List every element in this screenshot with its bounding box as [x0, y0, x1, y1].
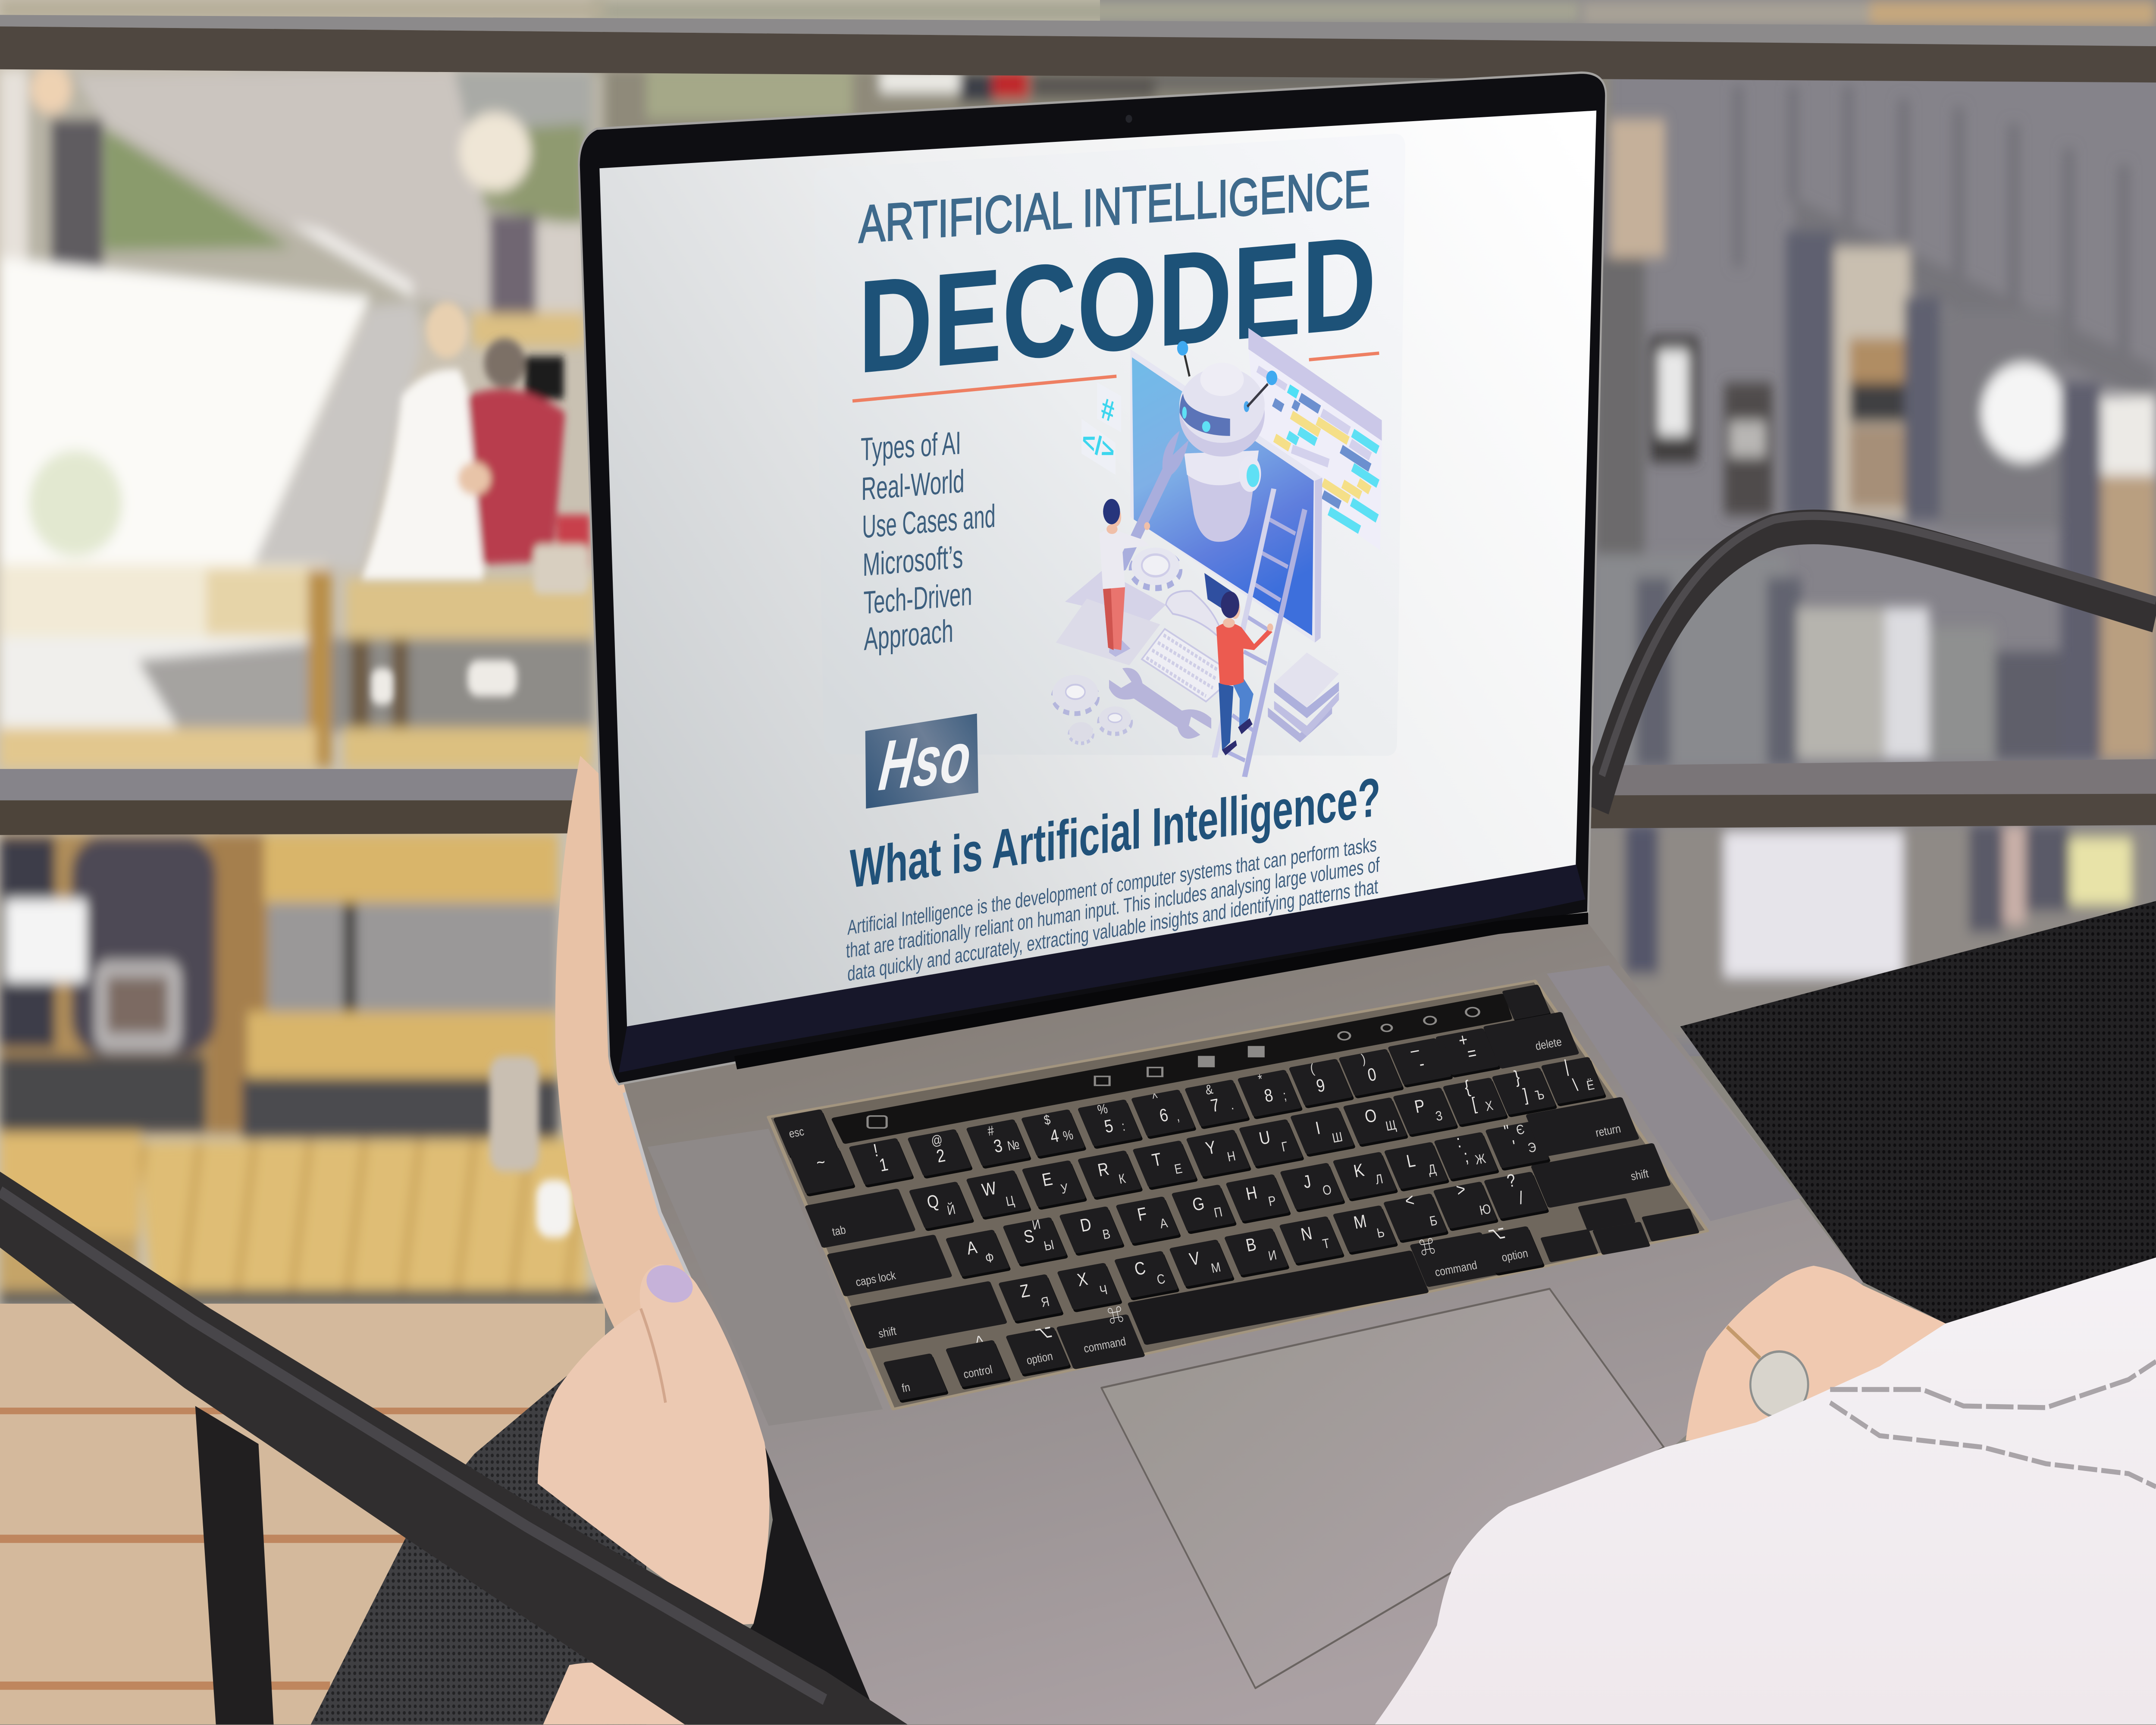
title DECODED: DECODED [858, 207, 1376, 401]
key labels: " [1502, 1121, 1512, 1142]
key labels: 7 [1209, 1095, 1221, 1116]
key labels: O [1363, 1105, 1379, 1127]
orange rule left [852, 376, 1116, 401]
keys [777, 986, 1697, 1401]
white shirt [1375, 1258, 2156, 1725]
key labels: % [1096, 1101, 1109, 1118]
key labels: Ц [1005, 1193, 1016, 1209]
key labels: А [1159, 1216, 1169, 1232]
code panel [1248, 328, 1382, 550]
key labels: ^ [975, 1332, 985, 1353]
paragraph: data quickly and accurately, extracting valuable insights and identifying patterns that [847, 875, 1378, 986]
person in white [1100, 499, 1150, 657]
lower bezel tint [619, 863, 1586, 1073]
key labels: { [1463, 1077, 1472, 1098]
key labels: shift [1630, 1167, 1650, 1183]
handrail top [0, 15, 2156, 82]
key labels: Ф [984, 1250, 995, 1266]
key labels: } [1513, 1067, 1522, 1088]
key labels: Я [1040, 1294, 1051, 1310]
heading: what is AI: What is Artificial Intelligence? [850, 766, 1381, 900]
key labels: , [1175, 1109, 1181, 1124]
key labels: K [1352, 1160, 1366, 1182]
key labels: О [1321, 1182, 1333, 1198]
key labels: command [1434, 1258, 1478, 1279]
fingernail [644, 1260, 696, 1308]
key labels: И [1031, 1217, 1042, 1233]
key labels: option [1501, 1247, 1529, 1264]
gears [1053, 675, 1131, 743]
key labels: Е [1173, 1161, 1184, 1177]
handrail middle [0, 759, 2156, 835]
key labels: Ё [1585, 1077, 1596, 1094]
keyboard well and keys [768, 981, 1707, 1409]
key labels: 5 [1103, 1116, 1115, 1137]
small wrench [1109, 668, 1211, 739]
floor planks [0, 1304, 605, 1725]
subtitle text block: Real-World [861, 463, 965, 507]
key labels: Ы [1043, 1237, 1056, 1254]
key labels: % [1062, 1127, 1075, 1144]
laptop base [623, 914, 1863, 1725]
hinge strip [734, 913, 1588, 1070]
key labels: Л [1374, 1172, 1384, 1188]
ladder [1212, 488, 1307, 777]
key labels: E [1040, 1169, 1054, 1190]
key labels: esc [788, 1125, 805, 1141]
subtitle text block [861, 425, 996, 657]
key labels: 9 [1315, 1075, 1327, 1096]
key labels: < [1403, 1190, 1416, 1211]
speaker grille left [648, 1129, 883, 1426]
speaker grille right [1547, 966, 1801, 1221]
key labels: Ю [1478, 1201, 1492, 1218]
monitor [1130, 349, 1322, 643]
key labels: # [986, 1123, 995, 1139]
camera [1125, 115, 1132, 123]
key labels: C [1133, 1258, 1147, 1280]
key labels: D [1078, 1214, 1093, 1236]
key labels: option [1025, 1350, 1054, 1367]
key labels: H [1244, 1182, 1259, 1204]
left hand [538, 1260, 769, 1625]
right hand [1686, 1266, 1946, 1441]
key labels: A [965, 1237, 979, 1259]
deck left edge highlight [624, 1092, 701, 1304]
key labels: ~ [815, 1152, 827, 1173]
key labels [788, 1029, 1650, 1395]
pearl ring [1750, 1352, 1808, 1418]
key labels: № [1006, 1137, 1021, 1154]
key labels: С [1156, 1271, 1166, 1288]
key labels: Ш [1331, 1129, 1344, 1146]
key labels: U [1257, 1127, 1272, 1149]
key labels: $ [1043, 1112, 1052, 1128]
key labels: - [1417, 1054, 1426, 1074]
key labels: = [1466, 1043, 1478, 1064]
foreground handrail [0, 1172, 908, 1725]
key labels: 6 [1158, 1105, 1170, 1126]
key labels: Г [1280, 1139, 1289, 1155]
key labels: R [1096, 1159, 1111, 1181]
key labels: ⌥ [1033, 1321, 1054, 1344]
touch bar icons [868, 1007, 1479, 1128]
laptop lid [579, 72, 1606, 1084]
key labels: Ч [1098, 1283, 1109, 1298]
key labels: 0 [1366, 1064, 1378, 1085]
touch bar [834, 996, 1509, 1142]
key labels: Ь [1376, 1225, 1386, 1241]
key labels: Q [925, 1191, 941, 1213]
subtitle text block: Types of AI [861, 425, 961, 467]
key labels: Й [946, 1201, 957, 1218]
person in red on ladder [1216, 591, 1273, 756]
key labels: : [1454, 1131, 1463, 1152]
background base colours [0, 0, 2156, 1304]
key labels: ) [1360, 1051, 1367, 1067]
key labels: control [962, 1363, 993, 1381]
keyboard illustration [1142, 629, 1221, 702]
ring [1727, 1327, 1760, 1358]
key labels: shift [877, 1324, 897, 1341]
key labels: 8 [1263, 1085, 1275, 1106]
key labels: ! [871, 1140, 880, 1161]
key labels: 2 [935, 1145, 947, 1167]
key labels: ( [1309, 1061, 1316, 1077]
key labels: 3 [992, 1135, 1004, 1157]
key labels: П [1213, 1204, 1224, 1221]
shadow below laptop [687, 1436, 880, 1725]
infographic hero panel [814, 134, 1405, 756]
key labels: & [1204, 1082, 1214, 1098]
orange rule right [1309, 353, 1379, 360]
key labels: Y [1204, 1137, 1218, 1159]
key labels: [ [1470, 1094, 1478, 1114]
black leggings left [311, 1320, 646, 1725]
key labels: command [1082, 1335, 1127, 1355]
key labels: Ж [1474, 1151, 1487, 1168]
key labels: ' [1511, 1136, 1518, 1157]
forearm behind laptop [555, 756, 701, 1328]
key labels: W [980, 1178, 998, 1200]
key labels: ⌘ [1106, 1305, 1125, 1327]
key labels: Э [1526, 1140, 1538, 1156]
isometric illustration [1053, 328, 1382, 777]
key labels: V [1188, 1248, 1202, 1270]
key labels: B [1244, 1234, 1258, 1256]
key labels: tab [831, 1223, 847, 1239]
mouse and cable [1166, 591, 1223, 638]
key labels: L [1405, 1151, 1417, 1172]
black leggings right [1680, 901, 2156, 1324]
key labels: ] [1521, 1085, 1529, 1105]
trackpad [1101, 1289, 1664, 1688]
HSO logo: Hso [876, 717, 975, 806]
finger crease [641, 1308, 665, 1403]
key labels: 1 [877, 1154, 890, 1176]
lid bezel [579, 72, 1606, 1084]
key labels: + [1457, 1029, 1470, 1051]
floor sheets [1056, 570, 1166, 665]
subtitle text block: Approach [864, 613, 953, 657]
paragraph: Artificial Intelligence is the development of computer systems that can perform tasks [847, 833, 1377, 940]
curved armrest on right [1595, 516, 2156, 809]
key labels: N [1299, 1223, 1314, 1245]
key labels: Є [1515, 1122, 1526, 1138]
key labels: ? [1505, 1170, 1517, 1192]
key labels: ⌘ [1418, 1236, 1437, 1259]
gear by the man [1131, 548, 1180, 587]
deck [623, 914, 1863, 1725]
key labels: M [1352, 1211, 1368, 1233]
key labels: return [1594, 1122, 1622, 1140]
silver chain bracelet [1830, 1361, 2156, 1487]
monitor stand [1204, 573, 1234, 611]
large wrench [1118, 431, 1189, 571]
key labels: И [1267, 1248, 1278, 1264]
title line 1: ARTIFICIAL INTELLIGENCE [859, 159, 1370, 254]
key labels: З [1434, 1108, 1444, 1124]
key labels: * [1257, 1072, 1264, 1087]
subtitle text block: Microsoft’s [863, 539, 963, 583]
key labels: Щ [1384, 1117, 1398, 1134]
key labels: fn [901, 1381, 911, 1395]
key labels: S [1022, 1226, 1036, 1248]
screen [599, 110, 1596, 1026]
key labels: Z [1018, 1280, 1031, 1302]
key labels: Б [1428, 1213, 1438, 1229]
key labels: У [1059, 1181, 1070, 1197]
subtitle text block: Tech-Driven [864, 576, 972, 621]
key labels: : [1120, 1119, 1126, 1134]
key labels: X [1075, 1269, 1089, 1290]
lower forearm [543, 1662, 687, 1725]
key labels: В [1101, 1226, 1112, 1242]
paragraph: that are traditionally reliant on human input. This includes analysing large volumes of [846, 853, 1380, 963]
robot [1177, 341, 1277, 542]
key labels: Х [1484, 1098, 1495, 1114]
key labels: ⌥ [1486, 1222, 1507, 1245]
key labels: К [1117, 1171, 1127, 1187]
key labels: Н [1226, 1148, 1237, 1165]
code icons: </> [1081, 423, 1116, 468]
key labels: G [1191, 1193, 1206, 1215]
key labels: ; [1462, 1146, 1470, 1167]
code icons [1081, 383, 1121, 475]
key labels: Д [1427, 1161, 1437, 1178]
key labels: J [1301, 1171, 1313, 1192]
key labels: ; [1282, 1088, 1288, 1104]
blurred background: right building [1581, 0, 2156, 1040]
key labels: I [1314, 1118, 1322, 1138]
key labels: 4 [1048, 1126, 1061, 1147]
blurred people in the courtyard [362, 302, 590, 1238]
key labels: Т [1321, 1236, 1331, 1252]
key labels: \ [1571, 1075, 1579, 1095]
key labels: @ [930, 1132, 944, 1149]
code icons: # [1100, 389, 1116, 430]
key labels: – [1408, 1039, 1421, 1061]
key labels: > [1454, 1179, 1467, 1200]
key labels: F [1136, 1204, 1149, 1225]
key labels: delete [1534, 1035, 1563, 1053]
blurred background: left courtyard [0, 0, 605, 1307]
key labels: Р [1267, 1193, 1277, 1209]
key labels: М [1210, 1260, 1222, 1276]
key labels: ^ [1151, 1091, 1159, 1107]
subtitle text block: Use Cases and [862, 498, 996, 545]
blurred background: behind laptop top [591, 0, 1609, 140]
key labels: T [1150, 1149, 1163, 1171]
key labels: . [1229, 1098, 1235, 1113]
key labels: | [1562, 1056, 1570, 1076]
key labels: P [1413, 1096, 1427, 1117]
book stack [1268, 652, 1339, 742]
key labels: Ъ [1534, 1087, 1546, 1104]
key labels: caps lock [855, 1269, 897, 1289]
key labels: / [1517, 1188, 1525, 1208]
